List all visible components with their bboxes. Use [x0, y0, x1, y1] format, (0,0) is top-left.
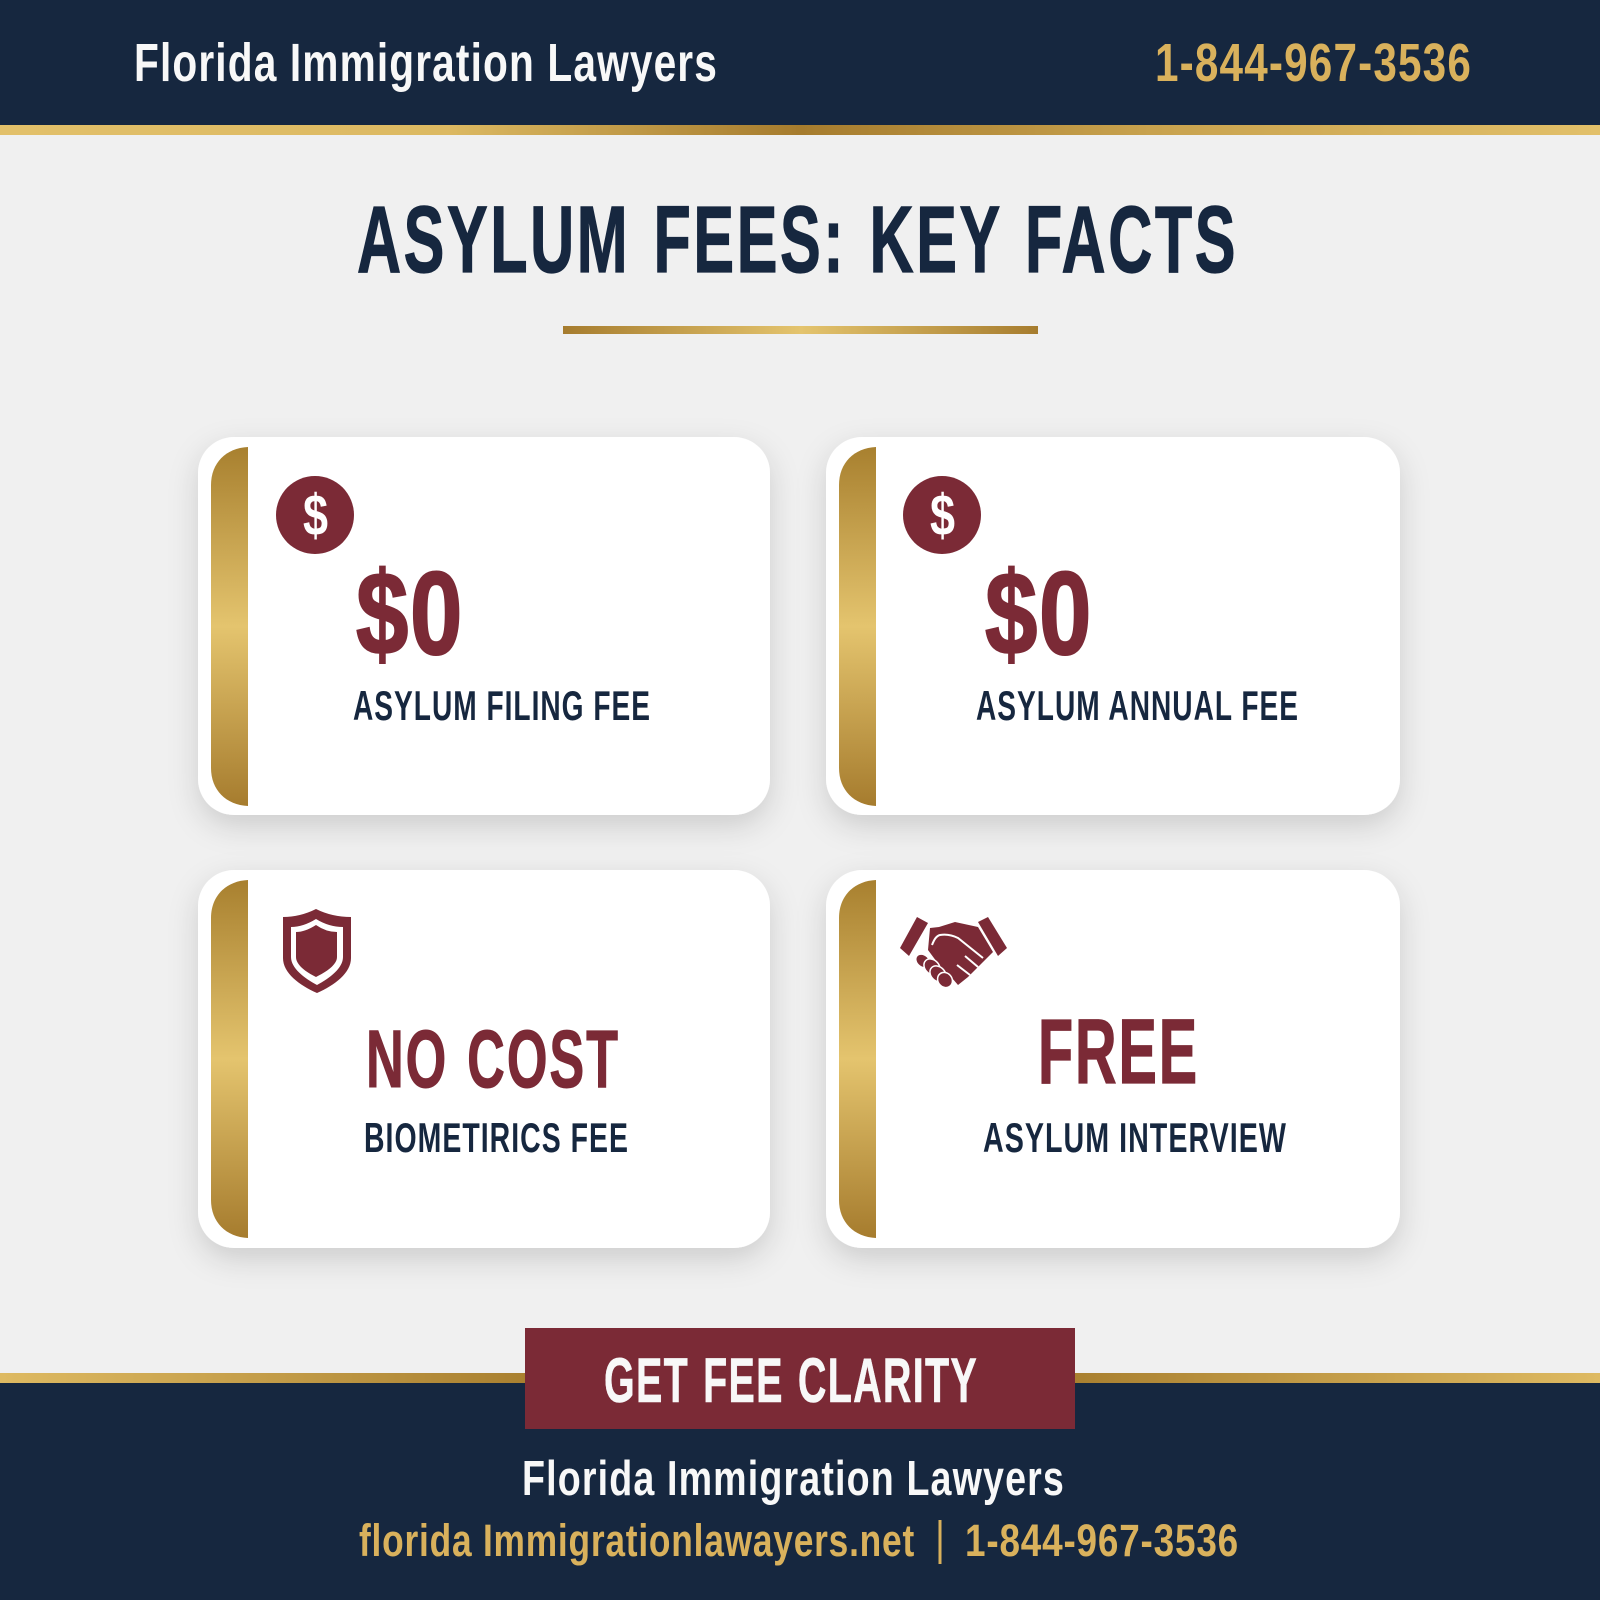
icon: shield — [283, 909, 351, 993]
header firm name: Florida Immigration Lawyers — [134, 33, 718, 93]
header phone number: 1-844-967-3536 — [1155, 33, 1472, 93]
value: $0: $0 — [985, 548, 1093, 680]
label: asylum filing fee: ASYLUM FILING FEE — [353, 682, 651, 729]
call to action button: GET FEE CLARITY — [604, 1346, 978, 1416]
icon: dollar coin — [276, 476, 354, 554]
value: free: FREE — [1038, 1001, 1199, 1103]
label: asylum annual fee: ASYLUM ANNUAL FEE — [976, 682, 1299, 729]
footer website: florida Immigrationlawayers.net — [359, 1515, 915, 1566]
footer separator — [938, 1520, 942, 1564]
panel: biometrics fee — [198, 870, 770, 1248]
panel: asylum annual fee — [826, 437, 1400, 815]
header band — [0, 0, 1600, 135]
value: $0: $0 — [356, 548, 464, 680]
footer firm name: Florida Immigration Lawyers — [522, 1452, 1065, 1506]
panel: asylum interview — [826, 870, 1400, 1248]
icon: dollar coin — [903, 476, 981, 554]
footer phone number: 1-844-967-3536 — [965, 1515, 1239, 1566]
value: no cost: NO COST — [366, 1014, 620, 1105]
icon: handshake — [900, 917, 1007, 991]
title underline — [563, 326, 1038, 334]
icon: dollar coin: $ — [303, 483, 328, 548]
panel: asylum filing fee — [198, 437, 770, 815]
label: asylum interview: ASYLUM INTERVIEW — [983, 1114, 1287, 1161]
footer band — [0, 1373, 1600, 1600]
call to action button — [525, 1328, 1075, 1429]
label: biometrics fee: BIOMETIRICS FEE — [364, 1114, 629, 1161]
icon: dollar coin: $ — [930, 483, 955, 548]
